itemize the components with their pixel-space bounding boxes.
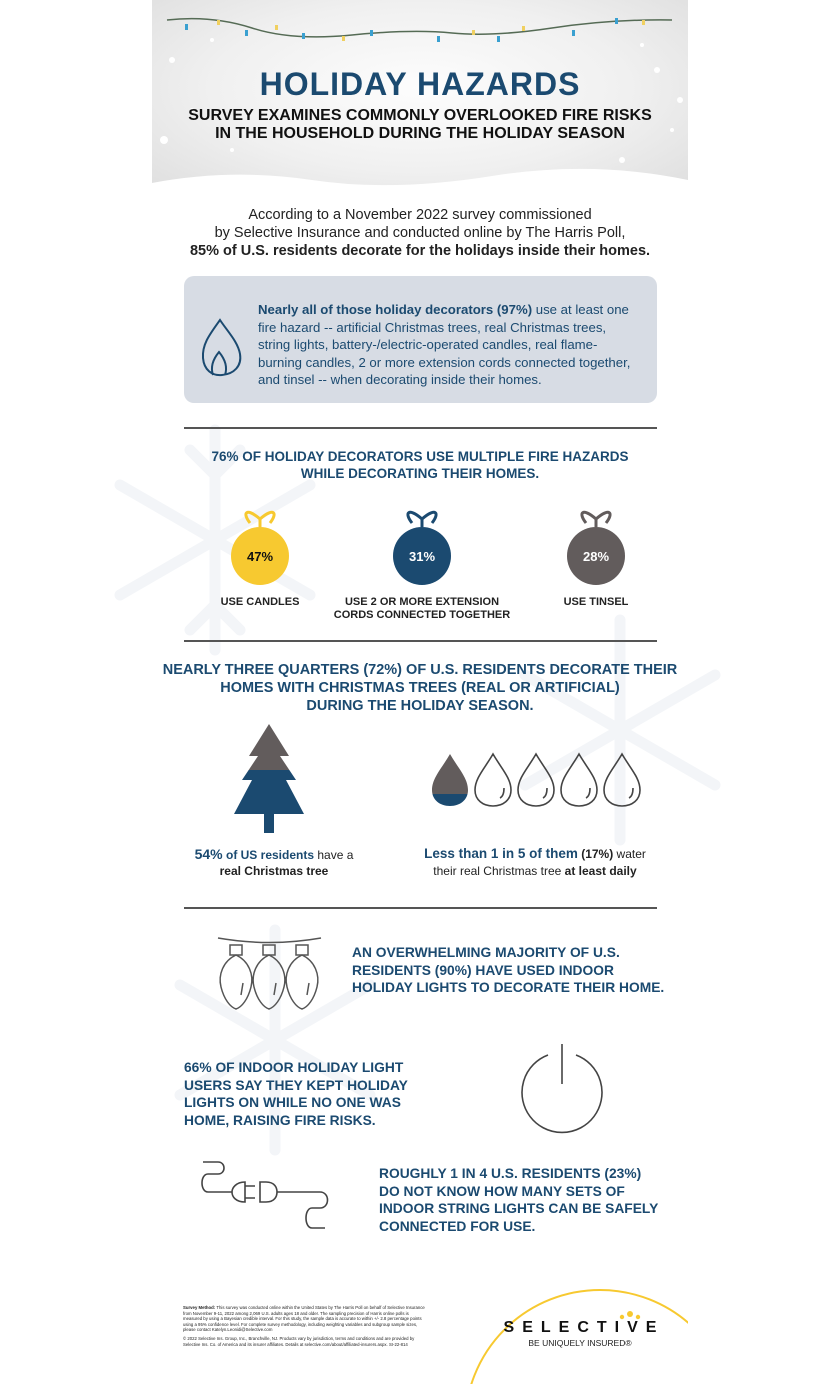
icon: plug: [201, 1161, 328, 1229]
logo: selective: BE UNIQUELY INSURED®: [528, 1338, 632, 1348]
ornament: 28% tinsel: 28%: [583, 549, 609, 564]
subtitle: SURVEY EXAMINES COMMONLY OVERLOOKED FIRE RISKS: [188, 107, 652, 124]
panel text: fire hazard -- artificial Christmas trees, real Christmas trees,: [258, 320, 606, 334]
footer: survey method: [183, 1305, 425, 1347]
intro text: According to a November 2022 survey commissioned: [248, 207, 592, 223]
header banner: [152, 0, 688, 195]
text: 90% indoor lights: RESIDENTS (90%) HAVE USED INDOOR: [352, 962, 614, 978]
string lights: [166, 18, 672, 42]
ornament: 47% candles: USE CANDLES: [221, 596, 299, 608]
ornament: 28% tinsel: [564, 510, 628, 608]
caption: 54% real tree: 54% of US residents have a: [195, 846, 353, 862]
text: 90% indoor lights: HOLIDAY LIGHTS TO DECORATE THEIR HOME.: [352, 980, 664, 995]
ornament: 31% extension cords: 31%: [409, 549, 435, 564]
text: 66% lights on: [184, 1060, 408, 1128]
logo: selective: [504, 1311, 664, 1348]
caption: 54% real tree: real Christmas tree: [220, 864, 328, 878]
text: 66% lights on: USERS SAY THEY KEPT HOLIDAY: [184, 1078, 408, 1092]
text: 66% lights on: LIGHTS ON WHILE NO ONE WAS: [184, 1095, 401, 1110]
ornament: 28% tinsel: USE TINSEL: [564, 596, 628, 608]
text: 23% string lights: INDOOR STRING LIGHTS CAN BE SAFELY: [379, 1201, 658, 1216]
intro text: [190, 207, 650, 259]
intro text: 85% of U.S. residents decorate for the holidays inside their homes.: [190, 243, 650, 259]
icon: water drops: [432, 752, 641, 807]
subtitle: [188, 107, 652, 142]
ornament: 31% extension cords: [334, 510, 510, 621]
footer: survey method: Survey Method: This survey was conducted online within the United States by The Harris Poll on behalf of Selective Insurance from November 9-11, 2022 among 2,069 U.S. adults ages 18 and older. The sampling precision of Harris online polls is measured by using a Bayesian credible interval. For this study, the sample data is accurate to within +/- 2.8 percentage points using a 95% confidence level. For complete survey methodology, including weighting variables and subgroup sample sizes, please contact Katelyn.Leonidi@Selective.com: [183, 1305, 425, 1332]
icon: flame: [202, 318, 242, 376]
ornament: 47% candles: [221, 510, 299, 608]
intro text: by Selective Insurance and conducted online by The Harris Poll,: [215, 225, 625, 241]
text: 23% string lights: [379, 1166, 658, 1234]
footer: survey method: © 2022 Selective Ins. Group, Inc., Branchville, NJ. Products vary by jurisdiction, terms and conditions and are provided by Selective Ins. Co. of America and its insurer affiliates. Details at selective.com/about/affiliated-insurers.aspx. SI-22-814: [183, 1336, 414, 1347]
heading: 76% multiple hazards: WHILE DECORATING THEIR HOMES.: [301, 466, 539, 481]
heading: 76% multiple hazards: 76% OF HOLIDAY DECORATORS USE MULTIPLE FIRE HAZARDS: [211, 449, 629, 464]
panel text: string lights, battery-/electric-operated candles, real flame-: [258, 337, 597, 352]
panel: 97% fire hazard: [184, 276, 657, 403]
panel text: [258, 302, 630, 387]
heading: 72% christmas trees: DURING THE HOLIDAY SEASON.: [306, 698, 534, 714]
panel text: and tinsel -- when decorating inside their homes.: [258, 372, 542, 387]
panel text: burning candles, 2 or more extension cords connected together,: [258, 354, 630, 370]
text: 23% string lights: CONNECTED FOR USE.: [379, 1218, 535, 1234]
text: 23% string lights: DO NOT KNOW HOW MANY SETS OF: [379, 1184, 625, 1198]
ornament: 31% extension cords: CORDS CONNECTED TOGETHER: [334, 609, 510, 621]
logo: selective: SELECTIVE: [504, 1319, 664, 1336]
icon: power button: [521, 1044, 603, 1134]
text: 66% lights on: 66% OF INDOOR HOLIDAY LIGHT: [184, 1060, 403, 1075]
logo arc: [470, 1289, 688, 1384]
caption: 17% water daily: Less than 1 in 5 of them (17%) water: [424, 846, 646, 861]
heading: 72% christmas trees: [163, 662, 677, 714]
heading: 72% christmas trees: HOMES WITH CHRISTMAS TREES (REAL OR ARTIFICIAL): [220, 680, 620, 696]
text: 66% lights on: HOME, RAISING FIRE RISKS.: [184, 1112, 376, 1128]
heading: 76% multiple hazards: [211, 449, 629, 481]
title: HOLIDAY HAZARDS: [260, 66, 580, 102]
subtitle: IN THE HOUSEHOLD DURING THE HOLIDAY SEASON: [215, 125, 625, 142]
text: 90% indoor lights: AN OVERWHELMING MAJORITY OF U.S.: [352, 945, 620, 960]
heading: 72% christmas trees: NEARLY THREE QUARTERS (72%) OF U.S. RESIDENTS DECORATE THEIR: [163, 662, 677, 678]
ornament: 31% extension cords: USE 2 OR MORE EXTENSION: [345, 596, 499, 608]
text: 90% indoor lights: [352, 945, 664, 995]
panel text: Nearly all of those holiday decorators (97%) use at least one: [258, 302, 629, 317]
icon: string light bulbs: [218, 937, 322, 1010]
caption: 17% water daily: [424, 846, 646, 878]
icon: christmas tree: [234, 724, 304, 833]
ornament: 47% candles: 47%: [247, 549, 273, 564]
text: 23% string lights: ROUGHLY 1 IN 4 U.S. RESIDENTS (23%): [379, 1166, 641, 1181]
caption: 17% water daily: their real Christmas tree at least daily: [433, 864, 637, 878]
caption: 54% real tree: [195, 846, 354, 878]
